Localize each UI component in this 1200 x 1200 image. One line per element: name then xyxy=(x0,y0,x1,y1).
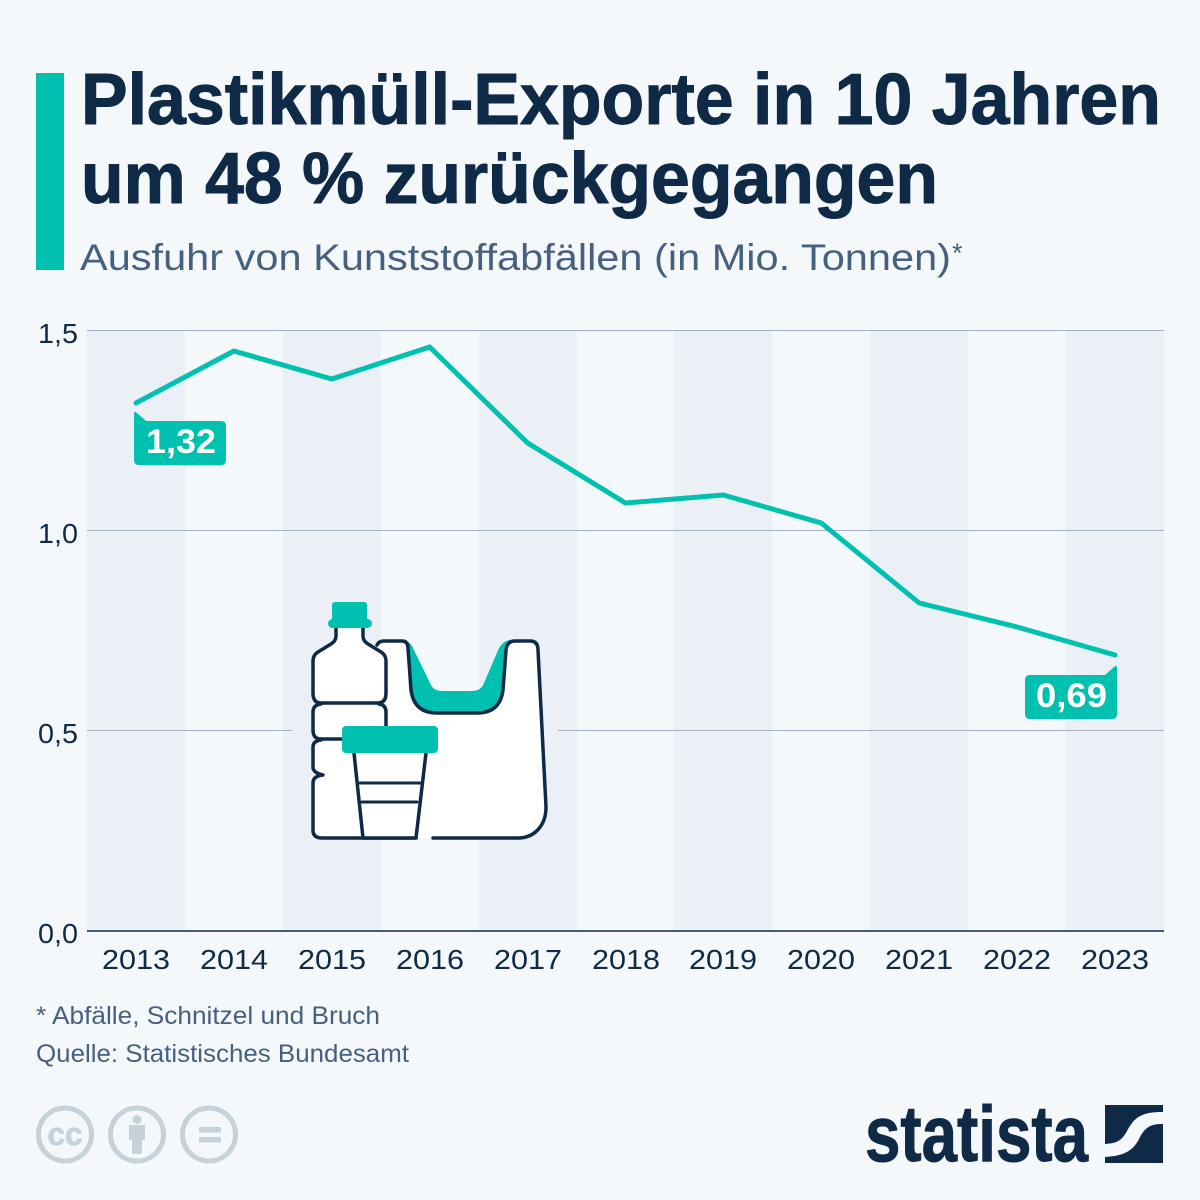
x axis labels: 2017 xyxy=(494,944,562,975)
chart bands xyxy=(87,331,1164,931)
source: Quelle: Statistisches Bundesamt xyxy=(36,1040,409,1068)
statista wordmark: statista xyxy=(865,1089,1089,1178)
icon: no derivatives xyxy=(182,1108,236,1161)
title: um 48 % zurückgegangen xyxy=(81,139,938,219)
chart xyxy=(38,318,1164,975)
data line xyxy=(136,347,1115,655)
callout: 2023 value xyxy=(1025,666,1117,719)
icon: cc license xyxy=(38,1108,92,1161)
x axis labels: 2013 xyxy=(102,944,170,975)
title xyxy=(81,60,1161,219)
y axis labels: 0,0 xyxy=(38,918,78,949)
subtitle: Ausfuhr von Kunststoffabfällen (in Mio. Tonnen) xyxy=(80,237,951,278)
icon: plastic waste xyxy=(313,602,546,838)
accent bar xyxy=(36,73,64,270)
subtitle: * xyxy=(952,238,963,268)
icon: attribution xyxy=(110,1108,164,1161)
title: Plastikmüll-Exporte in 10 Jahren xyxy=(81,60,1161,140)
footnote: * Abfälle, Schnitzel und Bruch xyxy=(36,1002,380,1030)
x axis labels: 2016 xyxy=(396,944,464,975)
y axis labels: 0,5 xyxy=(38,718,78,749)
x axis labels xyxy=(102,944,1149,975)
callout: 2023 value: 0,69 xyxy=(1036,677,1107,715)
icon: cup xyxy=(342,726,438,838)
x axis labels: 2018 xyxy=(592,944,660,975)
statista logo icon xyxy=(1105,1105,1163,1163)
callout: 2013 value xyxy=(134,412,226,465)
x axis labels: 2019 xyxy=(689,944,757,975)
y axis labels: 1,0 xyxy=(38,518,78,549)
icon: bag xyxy=(370,640,546,838)
x axis labels: 2015 xyxy=(298,944,366,975)
x axis labels: 2022 xyxy=(983,944,1051,975)
callout: 2013 value: 1,32 xyxy=(146,423,216,461)
y axis labels xyxy=(38,318,78,949)
x axis labels: 2023 xyxy=(1081,944,1149,975)
x axis labels: 2014 xyxy=(200,944,268,975)
icon: cc license: cc xyxy=(48,1116,82,1152)
x axis labels: 2020 xyxy=(787,944,855,975)
y axis labels: 1,5 xyxy=(38,318,78,349)
x axis labels: 2021 xyxy=(885,944,953,975)
icon: bottle xyxy=(313,602,416,838)
